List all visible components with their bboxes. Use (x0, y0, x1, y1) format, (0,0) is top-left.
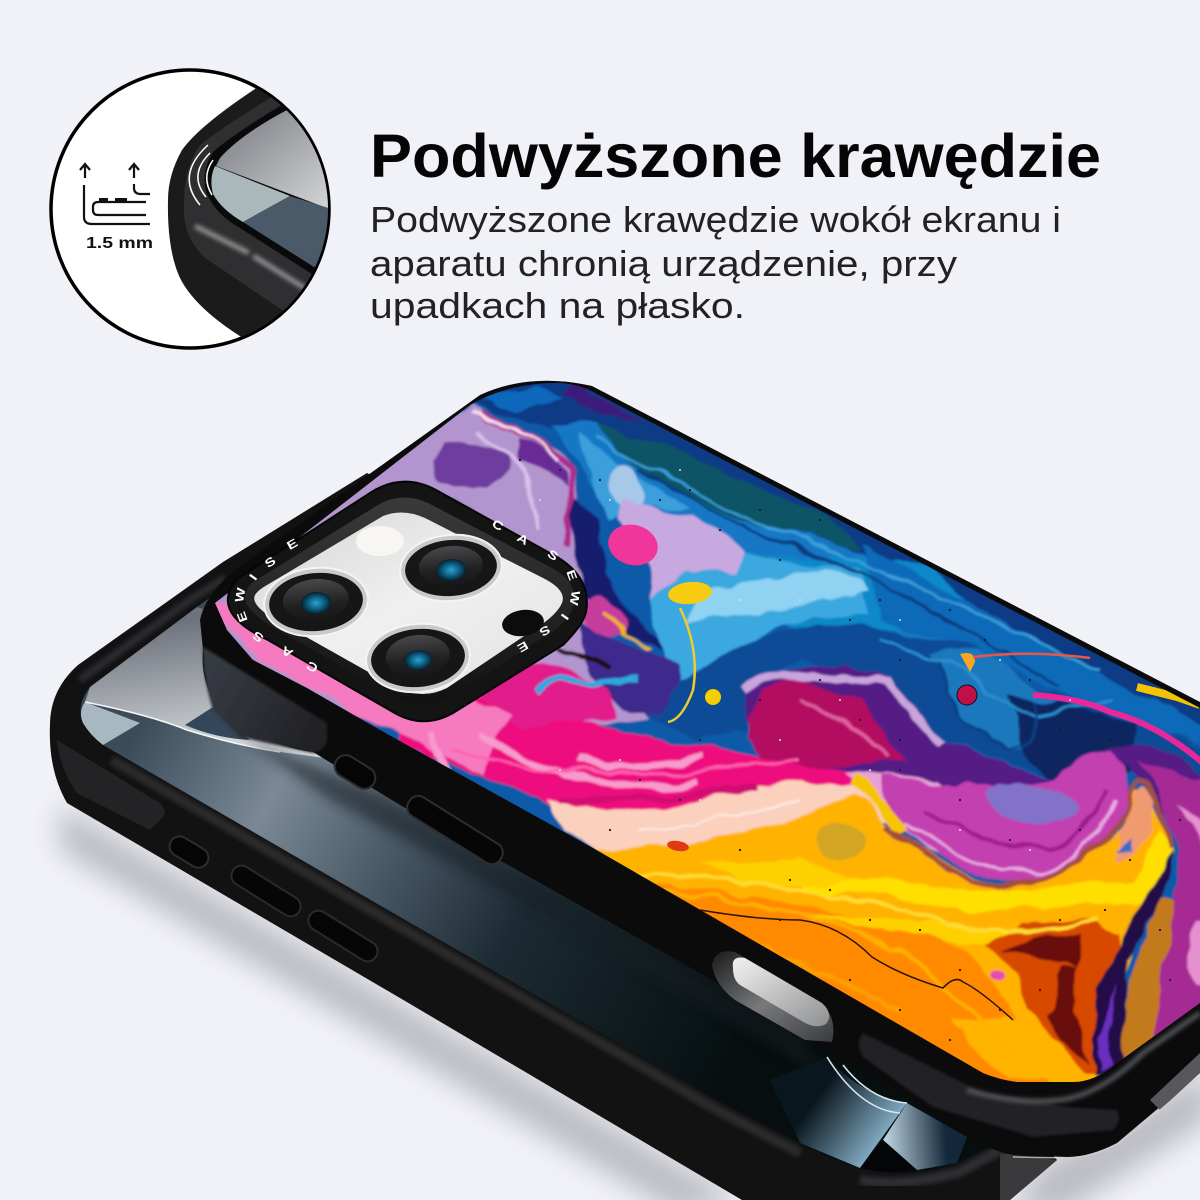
small yellow blob (705, 689, 721, 705)
upper blue (555, 425, 1000, 640)
red orange (985, 920, 1120, 1075)
lilac blob centre (985, 780, 1085, 832)
lilac top-left (200, 405, 650, 730)
lower-left camera side highlight (203, 647, 327, 753)
outer black ring (228, 482, 587, 721)
CASEWISE ring text: A (515, 531, 531, 548)
camera module (228, 482, 587, 721)
CASEWISE ring text: C (304, 658, 320, 675)
body text: aparatu chronią urządzenie, przy (370, 243, 957, 284)
beam lines (827, 1057, 907, 1113)
pale sky (690, 569, 868, 625)
white reflection curve (85, 702, 280, 752)
dark maroon upper (1000, 935, 1085, 965)
pink swirl near camera (480, 664, 615, 725)
purple patch right (515, 435, 565, 485)
glass window (254, 512, 563, 694)
dark teal-blue upper right (860, 545, 1200, 745)
sky lower (648, 552, 870, 682)
upper bumper sheen (80, 578, 225, 680)
pale upper blue (607, 463, 646, 506)
heading: Podwyższone krawędzie (370, 122, 1101, 190)
screen glass top (216, 110, 332, 210)
screen glass light (211, 166, 290, 222)
navy river (570, 497, 663, 652)
blue spot (1112, 833, 1135, 850)
edge highlight (197, 227, 303, 287)
ground shadow (60, 805, 1200, 1200)
red drop (666, 839, 690, 853)
side button: small (166, 833, 212, 871)
corner grey band (859, 1033, 1119, 1137)
screen (81, 490, 1000, 1173)
inset circle: raised edge close-up (51, 60, 340, 348)
pink swirl (583, 594, 630, 639)
marble pattern (215, 383, 1200, 1082)
impact arcs (189, 145, 213, 205)
case body (200, 381, 1200, 1157)
yellow ribbon (800, 827, 1173, 913)
purple band (742, 663, 1200, 816)
case corner (168, 88, 284, 337)
CASEWISE ring text: E (564, 568, 580, 582)
right ochre (1118, 900, 1200, 1070)
power button (403, 792, 507, 868)
dark river (1093, 850, 1172, 1078)
pink blob (604, 519, 662, 571)
screen glass dark (243, 196, 328, 268)
flow lines (420, 430, 1115, 1060)
CASEWISE ring text: W (567, 590, 582, 606)
bumper highlight left (57, 740, 165, 830)
lilac mid (620, 500, 745, 600)
lidar sensor (500, 607, 546, 639)
inner peach (1110, 790, 1155, 862)
lilac trim (745, 674, 945, 742)
CASEWISE ring text: I (558, 611, 571, 622)
blue top tip (480, 385, 560, 412)
body text: Podwyższone krawędzie wokół ekranu i (370, 199, 1061, 240)
body text: upadkach na płasko. (370, 285, 745, 326)
lilac blob (883, 748, 1125, 880)
purple streak (1098, 985, 1115, 1070)
CASEWISE ring text: S (262, 554, 278, 571)
flash (356, 526, 404, 556)
lens 3 (363, 620, 473, 696)
red blob (957, 685, 977, 705)
CASEWISE ring text: S (545, 547, 561, 564)
CASEWISE ring text: A (279, 643, 295, 660)
light beams right panel (883, 1103, 967, 1170)
pink streak right (1033, 695, 1200, 765)
front phone: case back (200, 381, 1200, 1158)
pale pink streak (430, 735, 705, 786)
speckles (520, 460, 1180, 1040)
back phone: screen side (50, 473, 1057, 1200)
olive patch (820, 822, 864, 862)
right pink swirl (1178, 800, 1200, 985)
teal band (600, 425, 860, 552)
orange field (590, 790, 1170, 1090)
inner bevel (245, 498, 575, 705)
speaker region (1150, 1053, 1200, 1110)
side button: volume down (305, 907, 381, 965)
yellow mid (700, 855, 850, 885)
lens 1 (261, 564, 371, 640)
crimson (748, 677, 905, 772)
pink spot in red (989, 970, 1005, 980)
yellow streak right (1137, 687, 1200, 705)
light glass triangle (81, 702, 140, 745)
side button: volume up (228, 862, 304, 920)
dark blob reflection (185, 707, 250, 740)
navy top strip (460, 380, 1200, 745)
orange deep (620, 872, 1050, 1090)
CASEWISE ring text: E (284, 536, 300, 552)
dark maroon lower (1045, 965, 1090, 1065)
black curl near camera (560, 648, 610, 670)
CASEWISE ring text: W (233, 587, 248, 603)
purple top (558, 383, 645, 420)
sky upper (580, 435, 690, 522)
pink line top right (973, 654, 1090, 658)
brown ring (883, 782, 1170, 886)
corner highlight (967, 1013, 1200, 1101)
yellow band lower (800, 915, 1030, 945)
icon: raised edge diagram (80, 164, 150, 224)
raised rim band (184, 98, 312, 310)
bright blue right (764, 556, 965, 632)
hot pink (400, 700, 885, 816)
purple swirl (580, 620, 682, 715)
silent switch (331, 751, 379, 793)
CASEWISE ring text: I (247, 572, 260, 583)
orange drop (960, 653, 975, 672)
CASEWISE ring text: S (250, 628, 266, 645)
yellow swirl (605, 610, 650, 650)
dark navy pool (1005, 695, 1135, 782)
charging port (712, 951, 834, 1042)
yellow blob (667, 580, 713, 606)
CASEWISE ring text: E (234, 610, 250, 624)
CASEWISE ring text: E (515, 639, 531, 655)
magenta ribbon (478, 412, 569, 545)
bumper frame (50, 473, 1057, 1200)
CASEWISE ring text: S (537, 623, 553, 639)
lower bumper sheen (112, 760, 800, 1153)
yellow strip (850, 783, 898, 830)
deep blue lower swirl (646, 622, 1200, 776)
purple patch (430, 442, 507, 490)
lens 2 (397, 531, 505, 605)
CASEWISE ring text: C (490, 517, 506, 534)
upper screen reflection (85, 607, 340, 760)
black triangle (860, 1140, 917, 1172)
inner black rim (204, 106, 318, 274)
label: 1.5 mm: 1.5 mm (86, 235, 153, 252)
case shadow on screen (240, 735, 830, 1080)
CASEWISE ring text (233, 517, 582, 675)
yellow drip (668, 608, 695, 722)
body text (370, 199, 1061, 326)
translucent corner edge (1000, 1153, 1057, 1200)
light beams left panel (770, 1057, 907, 1168)
pale speckles (540, 470, 1070, 850)
peach band (547, 782, 890, 852)
light pink near camera (200, 600, 510, 775)
blue curl near camera (535, 680, 640, 690)
lilac blob edge (840, 775, 1000, 870)
base blue (354, 383, 1200, 1081)
yellow-orange patch lower (950, 1020, 1067, 1082)
right magenta (1135, 760, 1200, 1040)
dark thin line (700, 910, 1013, 1020)
bottom corner sheen (860, 1150, 1000, 1183)
red-blob blue swirl (929, 647, 1058, 750)
bottom light rim (1013, 1077, 1200, 1158)
white ribbon (470, 412, 556, 462)
